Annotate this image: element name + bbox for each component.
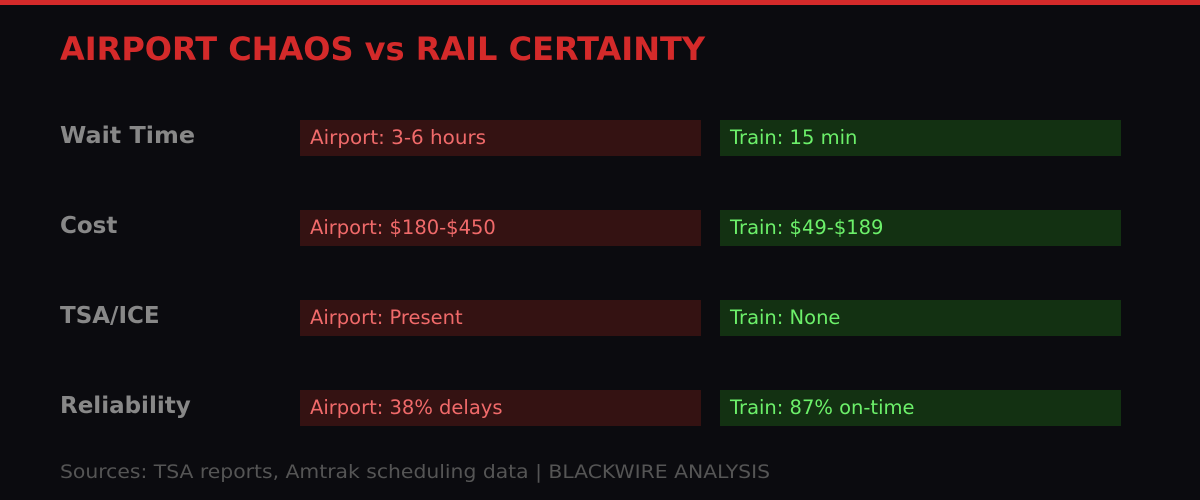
- row: cost: Cost: [60, 213, 117, 239]
- row: wait time: Wait Time: [60, 123, 195, 149]
- title: AIRPORT CHAOS vs RAIL CERTAINTY: [60, 30, 706, 68]
- row: wait time: Train: 15 min: [729, 126, 857, 149]
- row: cost: Airport: $180-$450: [310, 216, 496, 239]
- row: cost: [60, 210, 1121, 246]
- row: TSA/ICE: [60, 300, 1121, 336]
- row: reliability: Reliability: [60, 393, 191, 419]
- row: TSA/ICE: TSA/ICE: [60, 303, 160, 329]
- row: TSA/ICE: Train: None: [729, 306, 840, 329]
- row: wait time: [60, 120, 1121, 156]
- row: TSA/ICE: Airport: Present: [310, 306, 463, 329]
- row: reliability: Airport: 38% delays: [310, 396, 502, 419]
- footer sources: Sources: TSA reports, Amtrak scheduling data | BLACKWIRE ANALYSIS: [60, 461, 770, 483]
- row: reliability: [60, 390, 1121, 426]
- row: wait time: Airport: 3-6 hours: [310, 126, 486, 149]
- row: reliability: Train: 87% on-time: [729, 396, 914, 419]
- top accent bar: [0, 0, 1200, 5]
- row: cost: Train: $49-$189: [729, 216, 883, 239]
